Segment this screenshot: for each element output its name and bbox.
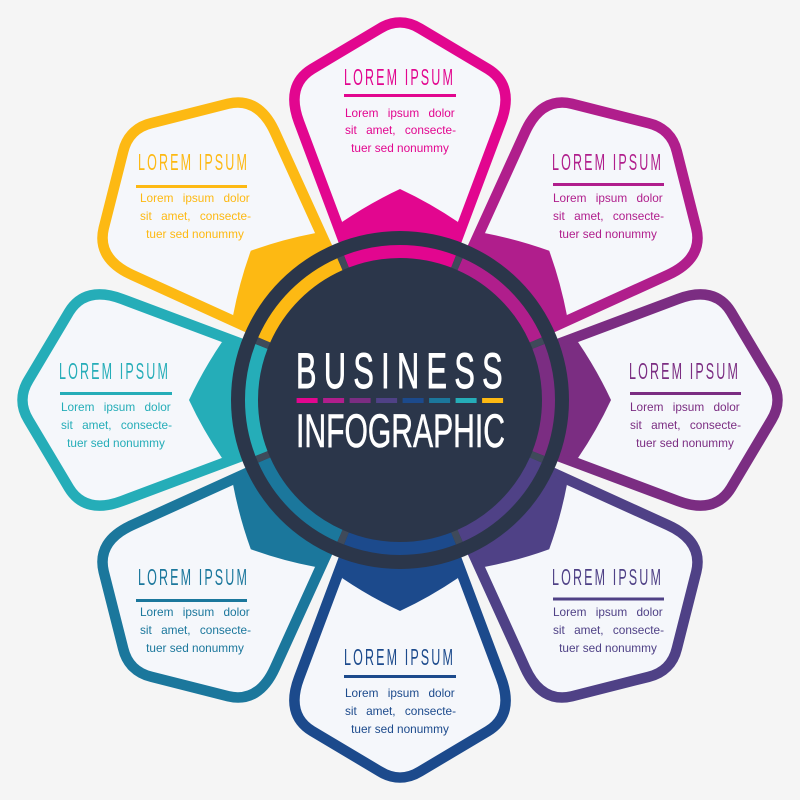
petal: lower left teal-blue bbox=[58, 396, 404, 742]
text block: bottom: tuer sed nonummy bbox=[351, 722, 449, 736]
text block: top: tuer sed nonummy bbox=[351, 141, 449, 155]
petal: bottom blue bbox=[294, 500, 506, 778]
text block: top bbox=[344, 64, 456, 155]
text block: left bbox=[59, 358, 172, 450]
text block: left: Lorem ipsum dolor bbox=[61, 400, 171, 414]
text block: left: tuer sed nonummy bbox=[67, 436, 165, 450]
petal: top magenta bbox=[294, 22, 506, 300]
central dark circle bbox=[231, 231, 569, 569]
petal: upper left yellow bbox=[58, 58, 404, 404]
petal: lower right indigo bbox=[396, 396, 742, 742]
text block: bottom: Lorem ipsum dolor bbox=[345, 686, 455, 700]
segmented colour ring bbox=[251, 251, 549, 549]
text block: top: LOREM IPSUM bbox=[344, 64, 455, 90]
petal: left teal bbox=[22, 294, 300, 506]
text block: lower left: Lorem ipsum dolor bbox=[140, 605, 250, 619]
text block: upper left: sit amet, consecte- bbox=[140, 209, 251, 223]
title: business: BUSINESS bbox=[296, 343, 510, 399]
text block: lower left: LOREM IPSUM bbox=[138, 564, 249, 590]
text block: lower right: tuer sed nonummy bbox=[559, 641, 657, 655]
text block: bottom: sit amet, consecte- bbox=[345, 704, 456, 718]
text block: right bbox=[629, 358, 741, 450]
text block: right: tuer sed nonummy bbox=[636, 436, 734, 450]
text block: upper right: tuer sed nonummy bbox=[559, 227, 657, 241]
text block: left: sit amet, consecte- bbox=[61, 418, 172, 432]
text block: upper left: Lorem ipsum dolor bbox=[140, 191, 250, 205]
title: infographic: INFOGRAPHIC bbox=[296, 404, 505, 457]
text block: upper left: LOREM IPSUM bbox=[138, 149, 249, 175]
text block: lower right: Lorem ipsum dolor bbox=[553, 605, 663, 619]
petal: right violet bbox=[500, 294, 778, 506]
text block: top: Lorem ipsum dolor bbox=[345, 106, 455, 120]
text block: bottom: LOREM IPSUM bbox=[344, 644, 455, 670]
text block: right: sit amet, consecte- bbox=[630, 418, 741, 432]
text block: lower right: LOREM IPSUM bbox=[552, 564, 663, 590]
text block: lower right bbox=[552, 564, 664, 655]
text block: upper right: LOREM IPSUM bbox=[552, 149, 663, 175]
text block: upper right: sit amet, consecte- bbox=[553, 209, 664, 223]
text block: lower right: sit amet, consecte- bbox=[553, 623, 664, 637]
text block: lower left bbox=[136, 564, 251, 655]
text block: upper right: Lorem ipsum dolor bbox=[553, 191, 663, 205]
text block: lower left: tuer sed nonummy bbox=[146, 641, 244, 655]
text block: upper left bbox=[136, 149, 251, 241]
text block: upper left: tuer sed nonummy bbox=[146, 227, 244, 241]
petal: upper right purple-magenta bbox=[396, 58, 742, 404]
title dashes bbox=[297, 398, 503, 403]
text block: right: Lorem ipsum dolor bbox=[630, 400, 740, 414]
text block: bottom bbox=[344, 644, 456, 736]
text block: upper right bbox=[552, 149, 664, 241]
text block: top: sit amet, consecte- bbox=[345, 123, 456, 137]
text block: left: LOREM IPSUM bbox=[59, 358, 170, 384]
text block: lower left: sit amet, consecte- bbox=[140, 623, 251, 637]
ring separators bbox=[255, 255, 545, 545]
